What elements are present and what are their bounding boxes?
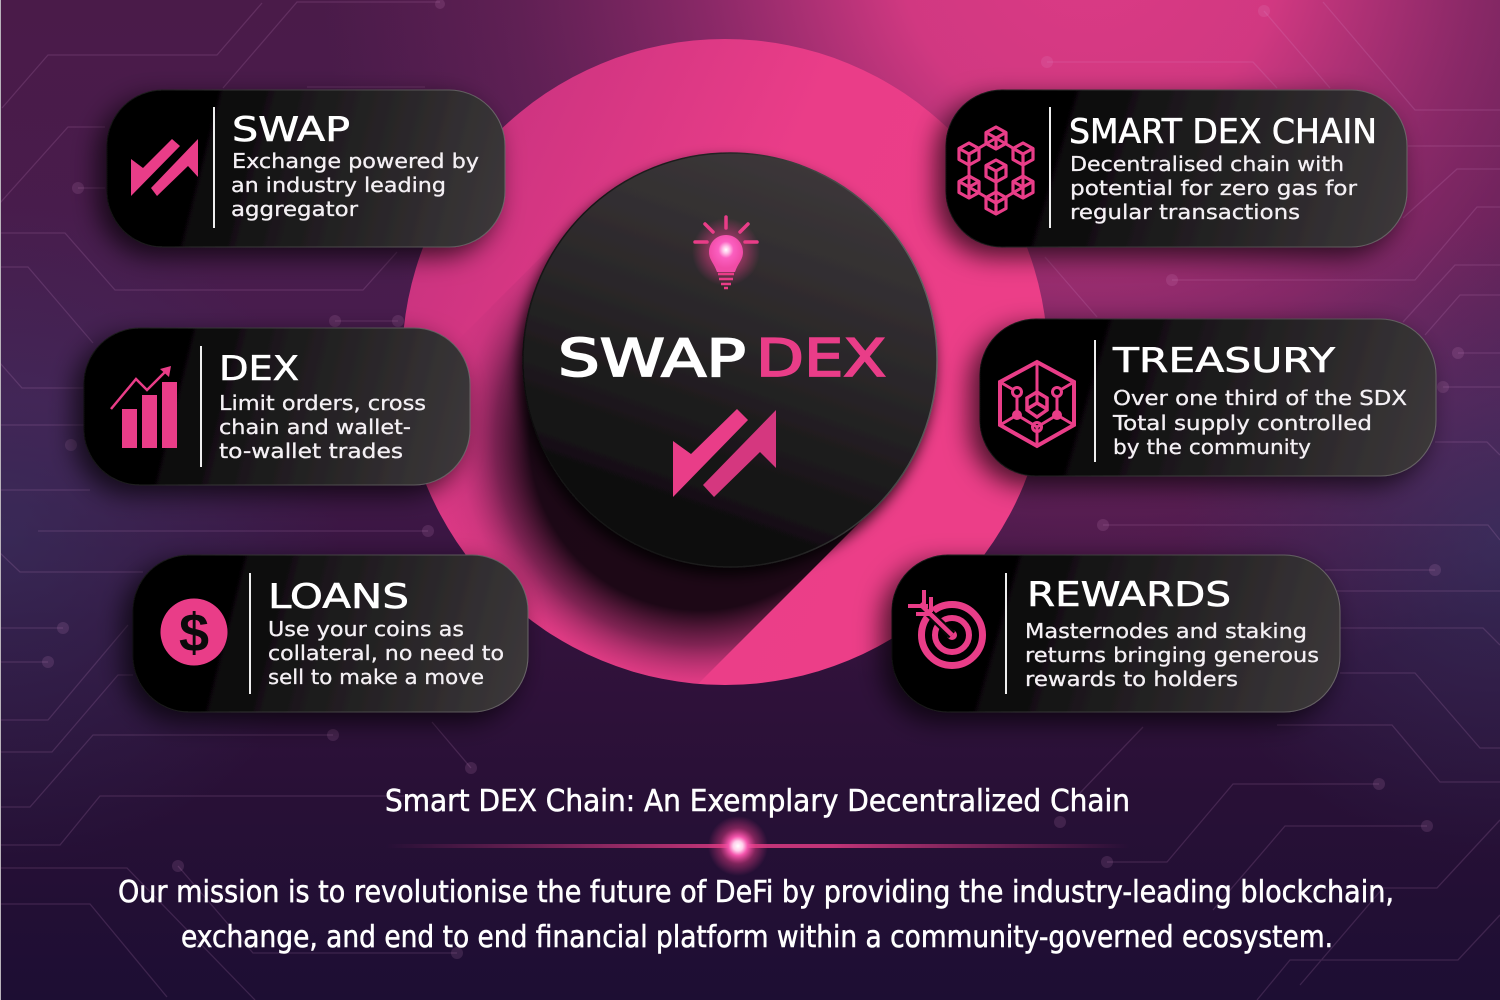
- TREASURY text: Over one third of the SDX: [1113, 386, 1407, 410]
- TREASURY text: [1112, 341, 1407, 459]
- DEX text: to-wallet trades: [219, 439, 403, 463]
- LOANS text: Use your coins as: [268, 617, 464, 641]
- LOANS text: collateral, no need to: [268, 641, 504, 665]
- TREASURY text: by the community: [1113, 435, 1311, 459]
- panel: REWARDS: [892, 555, 1340, 712]
- DEX text: [219, 349, 426, 463]
- icon: dollar coin: [160, 598, 228, 666]
- SWAP text: an industry leading: [231, 173, 446, 197]
- SMART DEX CHAIN text: SMART DEX CHAIN: [1069, 112, 1377, 152]
- divider: [213, 107, 215, 228]
- TREASURY text: TREASURY: [1112, 341, 1335, 381]
- divider: [249, 573, 251, 694]
- DEX text: chain and wallet-: [219, 415, 411, 439]
- icon: light bulb: [692, 217, 760, 288]
- panel: LOANS: [133, 555, 528, 712]
- DEX text: Limit orders, cross: [219, 391, 426, 415]
- SWAP text: SWAP: [232, 110, 350, 150]
- divider: [1005, 573, 1007, 694]
- logo wordmark: SWAP: [558, 329, 746, 389]
- panel: TREASURY: [980, 319, 1436, 476]
- icon: target and arrow: [908, 590, 982, 666]
- heading: Smart DEX Chain: Smart DEX Chain: An Exemplary Decentralized Chain: [385, 784, 1130, 819]
- SMART DEX CHAIN text: [1069, 112, 1377, 224]
- DEX text: DEX: [219, 349, 299, 389]
- TREASURY text: Total supply controlled: [1112, 411, 1372, 435]
- REWARDS text: Masternodes and staking: [1025, 619, 1307, 643]
- REWARDS text: rewards to holders: [1025, 667, 1238, 691]
- mission statement: Our mission is to revolutionise the future of DeFi by providing the industry-leading blockchain,: [118, 875, 1394, 910]
- panel: SMART DEX CHAIN: [946, 90, 1407, 247]
- SMART DEX CHAIN text: potential for zero gas for: [1070, 176, 1358, 200]
- icon: swap arrows: [673, 409, 776, 497]
- SWAP text: aggregator: [231, 197, 359, 221]
- SWAP text: [231, 110, 479, 221]
- REWARDS text: [1025, 575, 1319, 691]
- REWARDS text: returns bringing generous: [1025, 643, 1319, 667]
- central disc: [523, 153, 937, 567]
- icon: dollar coin: $: [179, 603, 209, 663]
- mission statement: [118, 875, 1394, 955]
- divider: [1094, 340, 1096, 462]
- panel: SWAP: [107, 90, 505, 247]
- logo wordmark: [558, 329, 886, 389]
- REWARDS text: REWARDS: [1027, 575, 1231, 615]
- SWAP text: Exchange powered by: [232, 149, 479, 173]
- glowing divider: [385, 816, 1130, 876]
- divider: [1049, 107, 1051, 228]
- mission statement: exchange, and end to end financial platform within a community-governed ecosystem.: [181, 920, 1333, 955]
- LOANS text: [268, 577, 504, 689]
- pink central ring: [404, 39, 1045, 685]
- icon: blockchain cubes: [959, 127, 1033, 214]
- SMART DEX CHAIN text: Decentralised chain with: [1070, 152, 1344, 176]
- icon: rising bar chart: [111, 366, 177, 448]
- panel: DEX: [84, 328, 470, 485]
- LOANS text: LOANS: [268, 577, 409, 617]
- icon: treasury hexagon: [1000, 362, 1074, 446]
- divider: [200, 346, 202, 467]
- icon: swap arrows: [131, 139, 198, 196]
- LOANS text: sell to make a move: [268, 665, 484, 689]
- logo wordmark: DEX: [756, 329, 886, 389]
- SMART DEX CHAIN text: regular transactions: [1070, 200, 1300, 224]
